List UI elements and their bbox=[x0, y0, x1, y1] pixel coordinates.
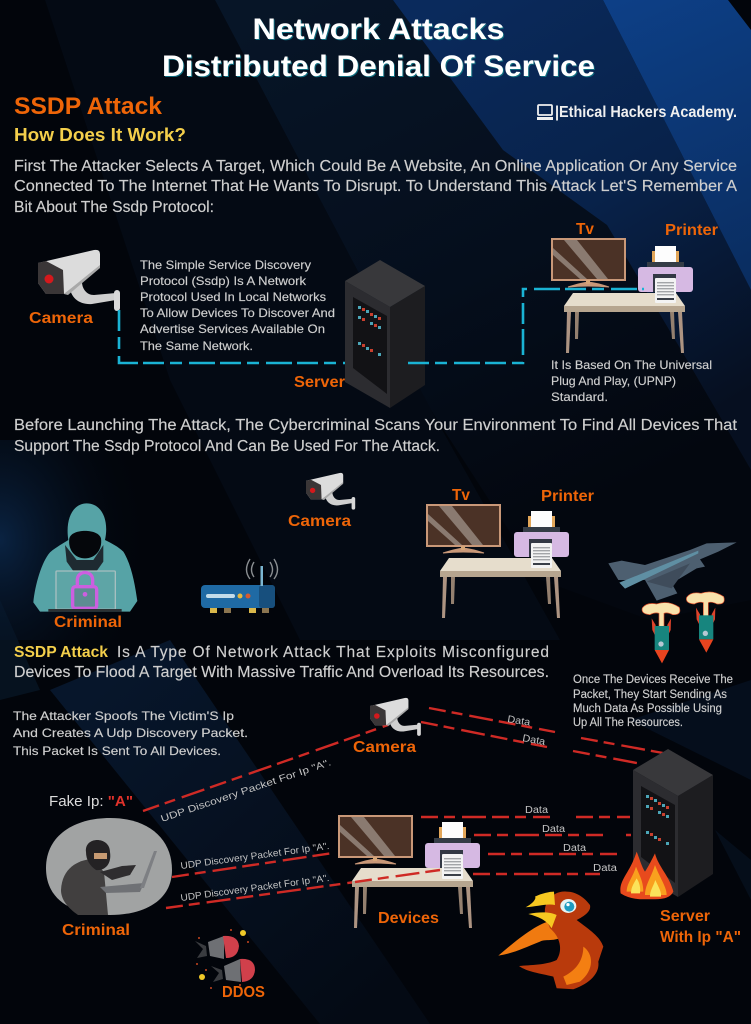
title: Network Attacks bbox=[254, 14, 506, 47]
SSDP attack definition: Is A Type Of Network Attack That Exploits Misconfigured bbox=[117, 644, 549, 661]
data labels: Data bbox=[542, 824, 565, 835]
label: camera: Camera bbox=[353, 739, 416, 756]
label: camera: Camera bbox=[288, 513, 351, 530]
packet labels: UDP Discovery Packet For Ip "A". bbox=[180, 873, 330, 904]
spoofing text bbox=[13, 709, 248, 758]
label: DDOS: DDOS bbox=[222, 984, 265, 1001]
SSDP definition text: Protocol Used In Local Networks bbox=[140, 290, 326, 304]
icon: camera bbox=[306, 473, 355, 510]
label: server with ip A: Server bbox=[660, 908, 710, 925]
data labels bbox=[507, 714, 617, 874]
icon: hooded criminal with laptop bbox=[33, 503, 137, 612]
icon: camera bbox=[38, 250, 120, 311]
SSDP attack definition bbox=[14, 644, 549, 681]
label: printer: Printer bbox=[541, 488, 594, 505]
data arrows bbox=[421, 708, 663, 874]
label: criminal: Criminal bbox=[54, 614, 122, 631]
icon: DDoS missiles bbox=[195, 929, 255, 989]
UPnP text: Standard. bbox=[551, 390, 608, 404]
data labels: Data bbox=[525, 805, 548, 816]
icon: tv on desk with printer bbox=[339, 816, 480, 928]
SSDP definition text: To Allow Devices To Discover And bbox=[140, 306, 335, 320]
title: Network Attacks bbox=[252, 13, 504, 46]
devices response text: Once The Devices Receive The bbox=[573, 674, 733, 686]
devices response text: Much Data As Possible Using bbox=[573, 703, 722, 715]
attack arrows: spoofed packets bbox=[143, 725, 388, 908]
title: Distributed Denial Of Service bbox=[163, 51, 596, 84]
data labels: Data bbox=[563, 843, 586, 854]
UPnP text: It Is Based On The Universal bbox=[551, 358, 712, 372]
label: tv: Tv bbox=[576, 221, 594, 238]
label: server with ip A: With Ip "A" bbox=[660, 929, 741, 946]
SSDP definition text: Protocol (Ssdp) Is A Network bbox=[140, 274, 307, 288]
intro paragraph: Bit About The Ssdp Protocol: bbox=[14, 199, 214, 216]
icon: wifi router bbox=[201, 559, 278, 613]
packet labels bbox=[159, 757, 333, 904]
SSDP definition text: The Simple Service Discovery bbox=[140, 258, 311, 272]
SSDP definition text bbox=[140, 258, 335, 353]
spoofing text: And Creates A Udp Discovery Packet. bbox=[13, 726, 248, 740]
label: camera: Camera bbox=[29, 310, 93, 327]
icon: tv on desk with printer bbox=[427, 505, 569, 618]
subheading: How Does It Work?: How Does It Work? bbox=[14, 124, 186, 145]
devices response text: Up All The Resources. bbox=[573, 717, 683, 729]
title bbox=[162, 13, 596, 84]
icon: tv on desk with printer bbox=[552, 239, 693, 353]
devices response text: Packet, They Start Sending As bbox=[573, 689, 727, 701]
SSDP attack definition: Devices To Flood A Target With Massive Traffic And Overload Its Resources. bbox=[14, 664, 549, 681]
icon: server bbox=[345, 260, 425, 408]
data labels: Data bbox=[507, 714, 531, 729]
label: printer: Printer bbox=[665, 222, 718, 239]
title: Distributed Denial Of Service bbox=[162, 50, 595, 83]
label: criminal: Criminal bbox=[62, 922, 130, 939]
icon: camera bbox=[370, 698, 421, 736]
scan paragraph: Before Launching The Attack, The Cybercriminal Scans Your Environment To Find All Devices That bbox=[14, 417, 738, 434]
SSDP attack definition: SSDP Attack bbox=[14, 644, 108, 661]
SSDP definition text: The Same Network. bbox=[140, 339, 253, 353]
packet labels: UDP Discovery Packet For Ip "A". bbox=[159, 757, 333, 825]
SSDP definition text: Advertise Services Available On bbox=[140, 322, 325, 336]
scan paragraph: Support The Ssdp Protocol And Can Be Used For The Attack. bbox=[14, 438, 440, 455]
label: server with ip A bbox=[660, 908, 741, 946]
scan paragraph bbox=[14, 417, 738, 455]
icon: fighter jet dropping bombs bbox=[608, 542, 737, 663]
spoofing text: This Packet Is Sent To All Devices. bbox=[13, 744, 221, 758]
intro paragraph: First The Attacker Selects A Target, Which Could Be A Website, An Online Application Or Any Service bbox=[14, 158, 737, 175]
intro paragraph: Connected To The Internet That He Wants To Disrupt. To Understand This Attack Let'S Remember A bbox=[14, 178, 738, 195]
UPnP text bbox=[551, 358, 712, 404]
icon: masked hacker in oval bbox=[46, 818, 172, 915]
heading: SSDP Attack: SSDP Attack bbox=[14, 93, 163, 120]
data labels: Data bbox=[521, 733, 547, 748]
network diagram: dashed connection bbox=[119, 289, 644, 363]
icon: flames bbox=[620, 852, 673, 899]
label: devices: Devices bbox=[378, 910, 439, 927]
spoofing text: The Attacker Spoofs The Victim'S Ip bbox=[13, 709, 234, 723]
logo: Ethical Hackers Academy: |Ethical Hackers Academy. bbox=[555, 104, 737, 121]
attack arrow over desk bbox=[355, 870, 440, 882]
data labels: Data bbox=[593, 863, 617, 874]
UPnP text: Plug And Play, (UPNP) bbox=[551, 374, 676, 388]
label: server: Server bbox=[294, 374, 345, 391]
devices response text bbox=[573, 674, 733, 729]
intro paragraph bbox=[14, 158, 738, 216]
icon: server under attack bbox=[633, 749, 713, 897]
packet labels: UDP Discovery Packet For Ip "A". bbox=[180, 841, 330, 872]
label: tv: Tv bbox=[452, 487, 470, 504]
label: fake ip: Fake Ip: "A" bbox=[49, 793, 133, 810]
icon: orange dragon mascot bbox=[498, 892, 603, 989]
